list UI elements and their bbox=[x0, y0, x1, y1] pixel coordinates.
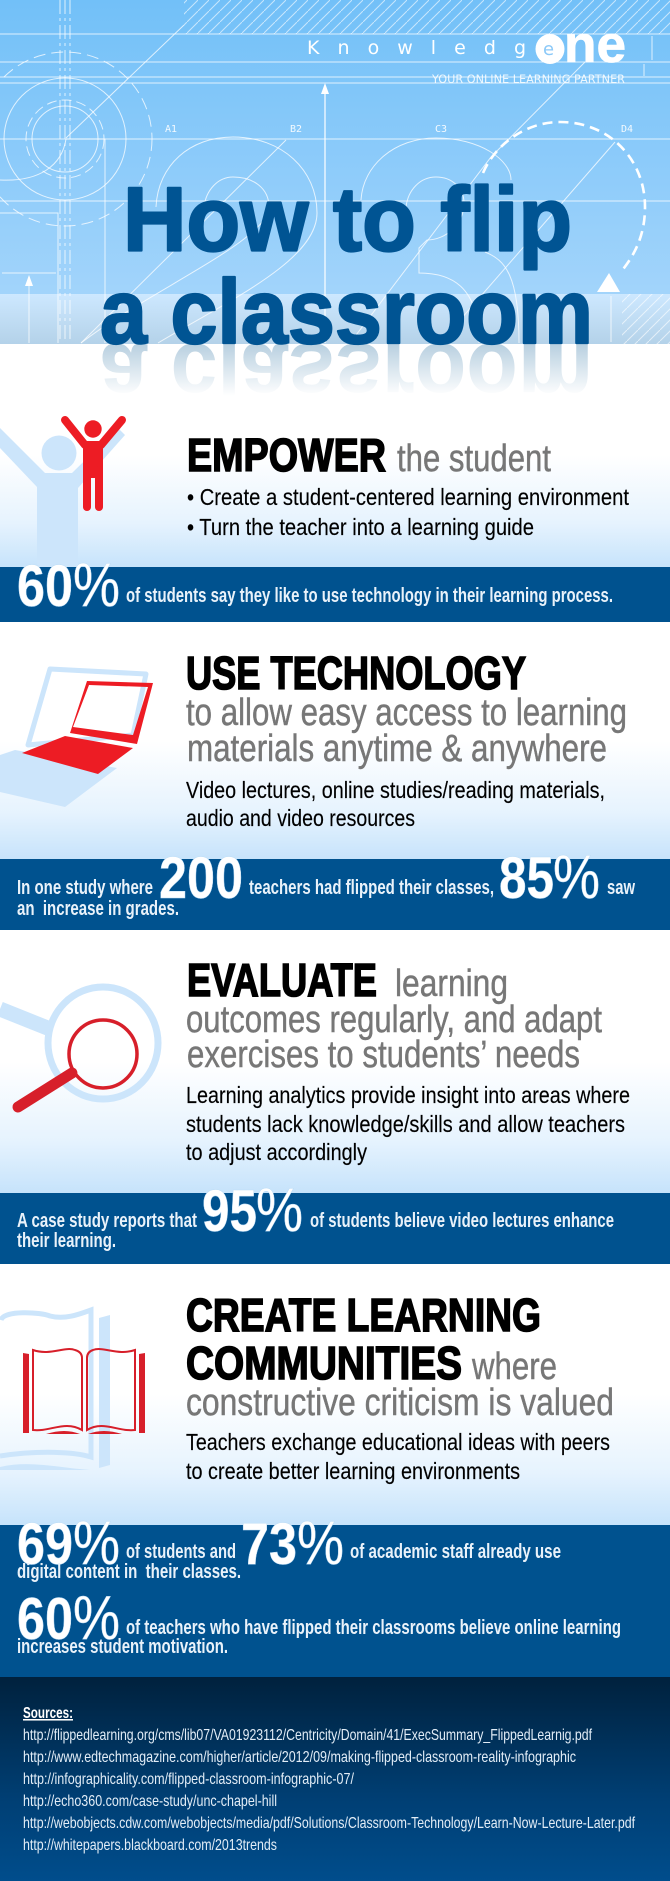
heading: exercises to students’ needs bbox=[187, 1034, 580, 1076]
bullet list: • Turn the teacher into a learning guide bbox=[187, 514, 534, 540]
stat band: 95 bbox=[202, 1178, 257, 1244]
grid labels: C3 bbox=[435, 124, 447, 135]
panel: use technology bbox=[0, 647, 670, 930]
stat band bbox=[0, 1176, 670, 1264]
logo: KnowledgeOne: YOUR ONLINE LEARNING PARTNER bbox=[431, 72, 625, 86]
title: a classroom bbox=[100, 262, 593, 363]
source links: http://infographicality.com/flipped-classroom-infographic-07/ bbox=[23, 1771, 354, 1788]
heading: where bbox=[471, 1346, 557, 1388]
heading: learning bbox=[395, 963, 508, 1005]
heading: EVALUATE bbox=[187, 954, 377, 1006]
stat band: 69 bbox=[17, 1511, 73, 1577]
body text bbox=[186, 1082, 630, 1165]
section backgrounds bbox=[0, 343, 670, 1525]
heading: CREATE LEARNING bbox=[186, 1289, 541, 1341]
title: How to flip bbox=[123, 170, 572, 270]
body text: to create better learning environments bbox=[186, 1458, 520, 1484]
body text: audio and video resources bbox=[186, 805, 415, 831]
panel: create learning communities bbox=[0, 1289, 670, 1677]
stat band: % bbox=[73, 551, 120, 620]
icon: magnifier bbox=[0, 987, 158, 1107]
source links bbox=[23, 1727, 635, 1854]
grid labels bbox=[165, 124, 633, 135]
body text: to adjust accordingly bbox=[186, 1139, 367, 1165]
body text bbox=[186, 1429, 610, 1484]
title reflection: a classroom bbox=[100, 324, 593, 425]
heading: EMPOWER bbox=[187, 429, 386, 481]
heading bbox=[186, 954, 602, 1076]
panel: header bbox=[0, 0, 670, 425]
stat band: of students and bbox=[126, 1541, 236, 1563]
grid labels: D4 bbox=[621, 124, 633, 135]
icon: student bbox=[0, 420, 125, 567]
stat band: teachers had flipped their classes, bbox=[249, 877, 494, 899]
heading bbox=[186, 1289, 614, 1424]
stat band: saw bbox=[607, 877, 635, 899]
stat band: 60 bbox=[17, 1586, 73, 1652]
source links: http://whitepapers.blackboard.com/2013trends bbox=[23, 1837, 277, 1854]
logo: KnowledgeOne bbox=[307, 16, 626, 86]
heading: COMMUNITIES bbox=[186, 1337, 462, 1389]
stat band: % bbox=[553, 843, 600, 912]
stat band: % bbox=[297, 1509, 344, 1578]
icon: book bbox=[0, 1310, 145, 1470]
stat band: % bbox=[73, 1584, 120, 1653]
logo: KnowledgeOne: e bbox=[543, 39, 554, 60]
stat band bbox=[0, 843, 670, 930]
grid labels: A1 bbox=[165, 124, 177, 135]
body text bbox=[186, 777, 605, 831]
stat band: A case study reports that bbox=[17, 1210, 197, 1232]
stat band: 73 bbox=[241, 1511, 297, 1577]
heading: the student bbox=[397, 438, 551, 480]
panel: evaluate bbox=[0, 954, 670, 1264]
stat band: % bbox=[73, 1509, 120, 1578]
logo: KnowledgeOne: ne bbox=[564, 16, 626, 74]
blueprint drawing lines bbox=[0, 0, 670, 344]
stat band: 200 bbox=[159, 845, 243, 911]
stat band: 85 bbox=[499, 845, 554, 911]
stat band: their learning. bbox=[17, 1230, 116, 1252]
stat band: 60 bbox=[17, 553, 73, 619]
panel: empower bbox=[0, 420, 670, 622]
bullet list bbox=[187, 484, 629, 540]
panel: sources bbox=[0, 1677, 670, 1881]
stat band: an increase in grades. bbox=[17, 898, 179, 920]
heading: USE TECHNOLOGY bbox=[186, 647, 526, 699]
source links: http://echo360.com/case-study/unc-chapel-hill bbox=[23, 1793, 277, 1810]
stat band: of academic staff already use bbox=[350, 1541, 561, 1563]
sources heading: Sources: bbox=[23, 1705, 73, 1722]
stat band: digital content in their classes. bbox=[17, 1561, 241, 1583]
stat band bbox=[0, 551, 670, 622]
stat band bbox=[0, 1509, 670, 1677]
stat band: increases student motivation. bbox=[17, 1636, 228, 1658]
heading bbox=[187, 429, 551, 481]
heading bbox=[186, 647, 627, 770]
stat band: In one study where bbox=[17, 877, 153, 899]
icon: laptop bbox=[0, 669, 153, 807]
stat band: % bbox=[256, 1176, 303, 1245]
logo: KnowledgeOne: Knowledg bbox=[307, 37, 526, 59]
grid labels: B2 bbox=[290, 124, 302, 135]
title bbox=[100, 170, 593, 363]
body text: Video lectures, online studies/reading materials, bbox=[186, 777, 605, 803]
